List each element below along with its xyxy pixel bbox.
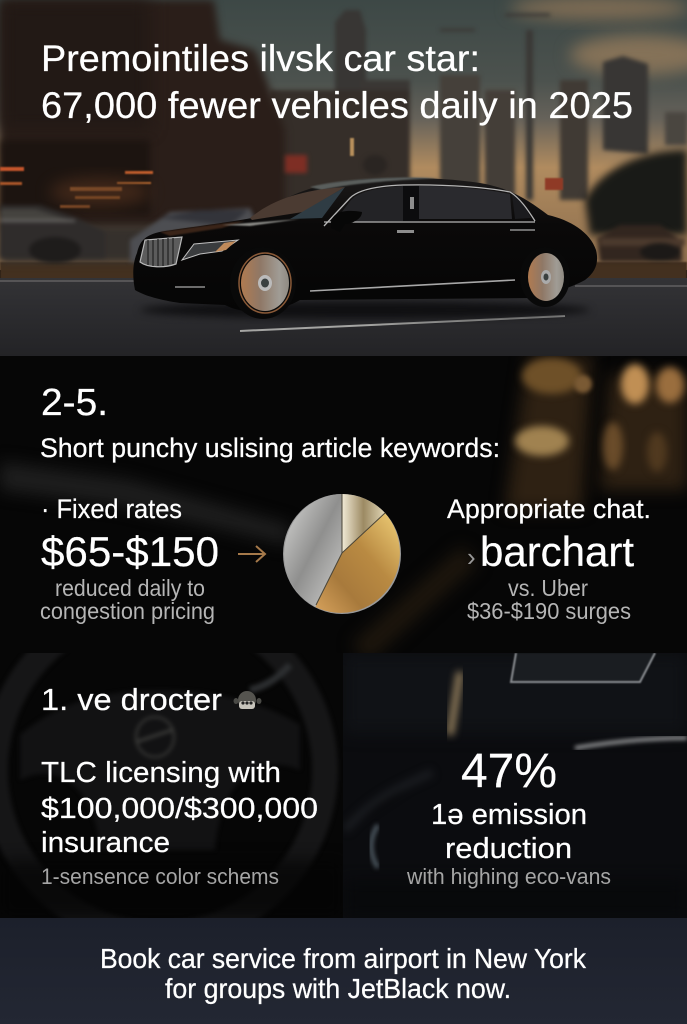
driver heading: 1. ve drocter [41,682,222,717]
call to action text: for groups with JetBlack now. [165,973,511,1004]
pie chart [283,494,401,614]
grille [140,237,182,267]
right column: Uber comparison [447,494,651,624]
title: 67,000 fewer vehicles daily in 2025 [41,85,633,126]
stat label: 1ə emission [431,799,587,831]
front wheel [230,247,296,319]
windshield [250,187,345,220]
left building [0,0,285,230]
headlight [182,240,238,260]
icon: robot face [234,691,262,709]
panel: hero with limousine [0,0,687,356]
right column: Uber comparison: Appropriate chat. [447,494,651,524]
licensing text [41,757,318,859]
road [0,278,687,356]
title: Premointiles ilvsk car star: [41,38,480,79]
arrow [238,546,265,562]
title [41,38,633,126]
stat caption: with highing eco-vans [406,864,611,889]
panel: call to action footer [0,918,687,1024]
left column: fixed rates: congestion pricing [40,598,215,624]
panel: emission reduction [343,653,687,918]
lane marking [240,316,565,331]
hero background: blurred city at dusk [0,0,687,356]
left column: fixed rates [40,494,219,624]
subheading: Short punchy uslising article keywords: [40,433,500,463]
side windows [334,186,403,222]
call to action text: Book car service from airport in New York [100,943,587,974]
stat: 47%: 47% [461,745,557,798]
sidewalk [0,262,687,280]
call to action text [100,943,587,1004]
dashboard background [343,653,687,918]
panel: driver licensing [0,653,340,918]
dark tree line [585,150,687,235]
licensing text: TLC licensing with [41,757,281,789]
chrome trim [324,185,535,226]
rear wheel [520,247,570,307]
left column: fixed rates: $65-$150 [41,528,219,575]
hood reflection [160,221,245,236]
stat label [431,799,587,865]
licensing text: $100,000/$300,000 [41,793,318,825]
number heading: 2-5. [41,382,108,424]
steering wheel background [0,653,340,918]
stat label: reduction [445,833,572,865]
right column: Uber comparison: barchart [480,528,634,575]
left column: fixed rates: reduced daily to [55,575,205,601]
pricing background with bokeh [0,356,687,653]
mirror [331,211,362,232]
street lights [0,138,563,208]
left column: fixed rates: · Fixed rates [41,494,182,524]
right column: Uber comparison: $36-$190 surges [467,598,631,624]
distant cars [0,205,685,263]
limousine [133,177,597,319]
licensing caption: 1-sensence color schems [41,864,279,889]
licensing text: insurance [41,827,170,859]
right column: Uber comparison: › [467,542,476,572]
roof highlight [310,177,440,190]
right column: Uber comparison: vs. Uber [508,575,588,601]
panel: fixed rates comparison [0,356,687,653]
